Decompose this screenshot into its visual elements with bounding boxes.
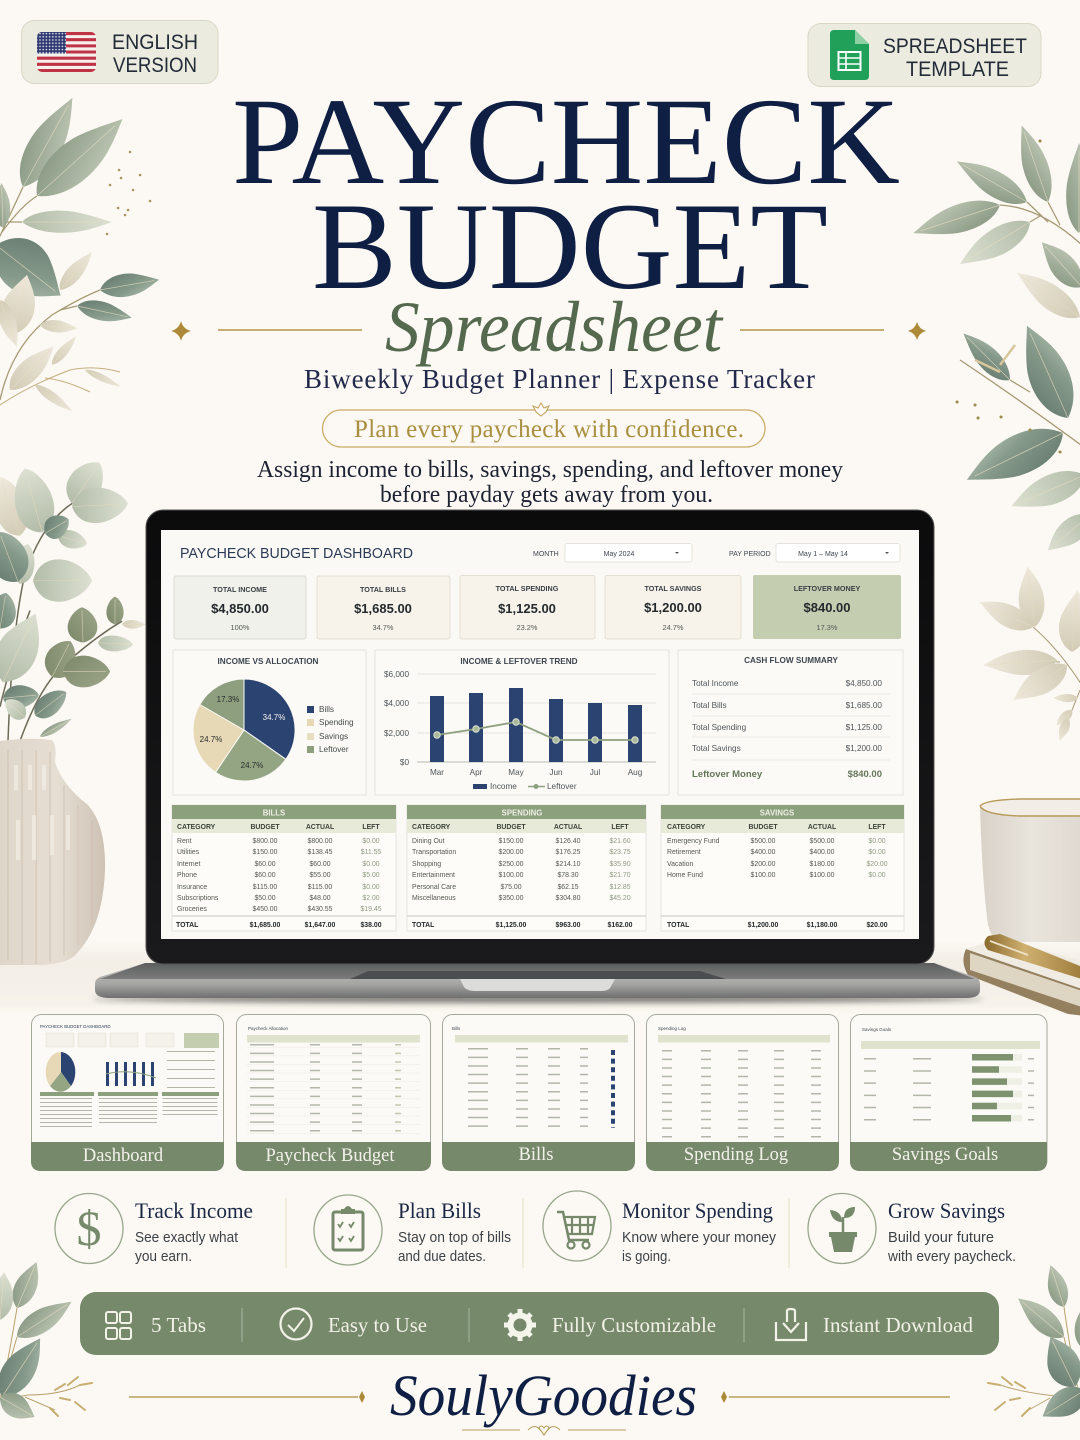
KPI card: leftover money: $840.00 (804, 600, 850, 615)
icon: clipboard (314, 1195, 382, 1265)
table: spending: Miscellaneous (412, 895, 456, 902)
subtitle: Spreadsheet with ornaments (171, 287, 926, 367)
feature: monitor spending: Know where your money (622, 1230, 777, 1246)
coffee cup (980, 799, 1080, 942)
KPI card: total savings: $1,200.00 (644, 600, 702, 615)
table: spending: $75.00 (500, 884, 522, 891)
feature: plan bills (314, 1195, 511, 1265)
KPI card: total bills: 34.7% (373, 623, 394, 632)
panel: income vs allocation pie: 34.7% (263, 713, 285, 722)
table: savings: Home Fund (667, 872, 703, 879)
pie legend: Leftover (319, 745, 349, 754)
month and pay period selectors: MONTH (533, 551, 559, 558)
panel: cash flow summary: Total Spending (692, 723, 747, 732)
pie legend: Bills (319, 705, 334, 714)
KPI card: total income: TOTAL INCOME (213, 585, 267, 594)
table: savings: $100.00 (751, 872, 776, 879)
table: savings: $1,200.00 (748, 922, 778, 929)
panel: income and leftover trend chart: $4,000 (384, 699, 409, 708)
table: savings: LEFT (868, 824, 886, 831)
pie legend (307, 705, 354, 754)
brand: SoulyGoodies (129, 1363, 950, 1435)
table: spending: $35.90 (609, 861, 631, 868)
panel: income and leftover trend chart: $0 (400, 758, 409, 767)
chart legend (473, 782, 577, 791)
vase (0, 739, 105, 965)
table: savings: $180.00 (810, 861, 835, 868)
table: savings: $200.00 (751, 861, 776, 868)
desk surface (0, 940, 1080, 1015)
leftover line (434, 719, 638, 743)
feature bar: Fully Customizable (552, 1313, 716, 1337)
thumbnail: spending log (646, 1014, 839, 1171)
feature bar: 5 Tabs (151, 1313, 206, 1337)
table: bills: Phone (177, 872, 197, 879)
botanical: bottom left corner (0, 1258, 92, 1427)
panel: income vs allocation pie: 17.3% (217, 695, 239, 704)
feature: plan bills: Plan Bills (398, 1198, 481, 1223)
icon: plant in pot (808, 1194, 876, 1264)
thumbnail: dashboard: Dashboard (83, 1146, 164, 1166)
table: savings: ACTUAL (808, 824, 836, 831)
table: bills: LEFT (362, 824, 380, 831)
botanical: left eucalyptus plant (0, 452, 146, 741)
feature: plan bills: Stay on top of bills (398, 1230, 511, 1246)
month and pay period selectors: PAY PERIOD (729, 551, 771, 558)
botanical: top left branch (0, 90, 161, 415)
table: bills: $38.00 (360, 922, 382, 929)
table: spending: Dining Out (412, 838, 445, 845)
feature: track income: Track Income (135, 1198, 253, 1223)
table: spending: $150.00 (499, 838, 524, 845)
panel: income and leftover trend chart: May (508, 768, 525, 777)
KPI card: total spending: 23.2% (517, 623, 538, 632)
panel: income and leftover trend chart: Mar (430, 768, 444, 777)
icon: dollar in circle: $ (76, 1200, 102, 1256)
panel: income and leftover trend chart (375, 650, 669, 795)
table: spending: $45.20 (609, 895, 631, 902)
icon: dollar in circle (55, 1194, 123, 1264)
feature: grow savings (808, 1194, 1016, 1265)
panel: cash flow summary: $4,850.00 (846, 679, 882, 688)
icon: check circle (280, 1308, 312, 1340)
table: savings: TOTAL (667, 922, 689, 929)
panel: cash flow summary: $1,200.00 (846, 744, 882, 753)
table: bills: $60.00 (254, 872, 276, 879)
table: bills: $800.00 (308, 838, 333, 845)
panel: cash flow summary (678, 650, 903, 795)
table: savings: $400.00 (751, 849, 776, 856)
KPI card: total income (174, 576, 306, 639)
thumbnail: dashboard: PAYCHECK BUDGET DASHBOARD (40, 1024, 110, 1029)
table: savings: SAVINGS (760, 808, 794, 818)
table: bills: $11.55 (361, 849, 381, 856)
table: spending: $963.00 (556, 922, 581, 929)
thumbnail: dashboard (31, 1014, 224, 1171)
table: spending: $304.80 (556, 895, 581, 902)
KPI card: total bills (317, 576, 450, 639)
panel: cash flow summary: CASH FLOW SUMMARY (744, 656, 838, 665)
table: spending: $214.10 (556, 861, 581, 868)
panel: income and leftover trend chart: Jul (590, 768, 600, 777)
panel: income vs allocation pie: 24.7% (241, 761, 263, 770)
icon: gear (504, 1309, 536, 1341)
table: savings: $0.00 (868, 872, 886, 879)
table: bills: Subscriptions (177, 895, 219, 902)
panel: cash flow summary: Total Savings (692, 744, 741, 753)
table: savings (661, 805, 904, 931)
icon: shopping cart (543, 1191, 611, 1261)
panel: income and leftover trend chart: Aug (628, 768, 643, 777)
description text: before payday gets away from you. (380, 482, 713, 508)
KPI card: leftover money (753, 575, 901, 639)
table: savings: $100.00 (810, 872, 835, 879)
table: spending: CATEGORY (412, 824, 451, 831)
thumbnail: bills: Bills (452, 1026, 461, 1031)
month and pay period selectors: May 2024 (604, 551, 634, 558)
table: bills: $48.00 (309, 895, 331, 902)
description text (257, 457, 843, 508)
badge: english version (22, 20, 218, 84)
KPI card: leftover money: LEFTOVER MONEY (794, 584, 860, 593)
table: spending: $62.15 (557, 884, 579, 891)
thumbnail: spending log: Spending Log (684, 1145, 788, 1165)
table: bills: $55.00 (309, 872, 331, 879)
feature: monitor spending: is going. (622, 1249, 671, 1265)
panel: cash flow summary: Leftover Money (692, 769, 763, 780)
feature: grow savings: with every paycheck. (887, 1249, 1016, 1265)
title: PAYCHECK BUDGET: BUDGET (312, 178, 828, 315)
thumbnail: bills: Bills (519, 1145, 553, 1165)
pie legend: Savings (319, 732, 348, 741)
KPI card: leftover money: 17.3% (817, 623, 838, 632)
table: bills: $1,647.00 (305, 922, 335, 929)
table: bills: CATEGORY (177, 824, 216, 831)
screen (161, 530, 919, 939)
panel: income and leftover trend chart: $2,000 (384, 729, 409, 738)
table: spending: $21.60 (609, 838, 631, 845)
table: bills: $60.00 (309, 861, 331, 868)
panel: cash flow summary: $1,125.00 (846, 723, 882, 732)
panel: income and leftover trend chart: Jun (549, 768, 563, 777)
icon: google sheets (830, 30, 869, 80)
feature bar (80, 1292, 999, 1355)
table: savings: $400.00 (810, 849, 835, 856)
botanical: top right branch (909, 121, 1080, 560)
badge: english version: VERSION (113, 54, 197, 77)
feature: monitor spending (543, 1191, 777, 1265)
botanical: right mid sprig (975, 565, 1080, 742)
dashboard title: PAYCHECK BUDGET DASHBOARD (180, 546, 413, 562)
chart legend: Leftover (547, 782, 577, 791)
KPI card: total savings (605, 576, 741, 639)
table: savings: Emergency Fund (667, 838, 720, 845)
table: bills: Utilities (177, 849, 200, 856)
table: bills: $5.00 (362, 872, 380, 879)
table: bills: TOTAL (176, 922, 198, 929)
botanical: bottom right corner (988, 1262, 1080, 1428)
table: bills: $2.00 (362, 895, 380, 902)
table: spending: SPENDING (502, 808, 542, 818)
panel: cash flow summary: $1,685.00 (846, 701, 882, 710)
table: bills: $138.45 (308, 849, 333, 856)
thumbnail: paycheck budget (236, 1014, 431, 1171)
tagline: biweekly budget planner: Biweekly Budget Planner | Expense Tracker (304, 364, 815, 394)
table: savings: BUDGET (748, 824, 778, 831)
table: spending: $78.30 (557, 872, 579, 879)
table: savings: $0.00 (868, 849, 886, 856)
panel: income and leftover trend chart: INCOME & LEFTOVER TREND (460, 657, 578, 666)
badge: spreadsheet template: TEMPLATE (906, 58, 1009, 81)
feature: grow savings: Grow Savings (888, 1198, 1005, 1223)
thumbnail: savings goals: Savings Goals (892, 1145, 998, 1165)
bars (430, 688, 642, 762)
panel: cash flow summary: Total Income (692, 679, 739, 688)
table: bills: $1,685.00 (250, 922, 280, 929)
table: bills: $60.00 (254, 861, 276, 868)
table: spending: TOTAL (412, 922, 434, 929)
KPI card: total income: $4,850.00 (211, 601, 269, 616)
table: savings: $20.00 (866, 861, 888, 868)
table: bills: Internet (177, 861, 200, 868)
panel: income and leftover trend chart: Apr (470, 768, 483, 777)
feature: monitor spending: Monitor Spending (622, 1198, 773, 1223)
laptop screen bezel (146, 510, 934, 964)
pill: plan every paycheck (322, 403, 765, 447)
panel: cash flow summary: Total Bills (692, 701, 727, 710)
thumbnail: savings goals (850, 1014, 1047, 1171)
table: spending: $126.40 (556, 838, 581, 845)
table: bills: $150.00 (253, 849, 278, 856)
feature: track income: you earn. (135, 1249, 192, 1265)
pill: plan every paycheck: Plan every paycheck with confidence. (354, 416, 744, 443)
icon: US flag (37, 32, 96, 72)
table: spending: $250.00 (499, 861, 524, 868)
panel: income vs allocation pie: INCOME VS ALLOCATION (218, 657, 319, 666)
table: bills: $430.55 (308, 906, 333, 913)
thumbnail: paycheck budget: Paycheck Budget (266, 1146, 395, 1166)
table: savings: CATEGORY (667, 824, 706, 831)
table: bills: BUDGET (250, 824, 280, 831)
table: spending: $100.00 (499, 872, 524, 879)
icon: download (776, 1309, 806, 1340)
month and pay period selectors (533, 544, 900, 562)
laptop base (95, 963, 980, 998)
table: savings: $500.00 (810, 838, 835, 845)
panel: income vs allocation pie (173, 650, 366, 795)
table: bills: $450.00 (253, 906, 278, 913)
table: spending: Shopping (412, 861, 441, 868)
KPI card: total spending: TOTAL SPENDING (496, 584, 559, 593)
feature: track income: See exactly what (135, 1230, 238, 1246)
panel: income and leftover trend chart: $6,000 (384, 670, 409, 679)
title: PAYCHECK BUDGET: PAYCHECK (232, 73, 900, 210)
table: bills: $19.45 (360, 906, 382, 913)
table: spending: $200.00 (499, 849, 524, 856)
table: bills: $50.00 (254, 895, 276, 902)
table: spending: $21.70 (609, 872, 631, 879)
table: bills: $0.00 (362, 884, 380, 891)
thumbnail: savings goals: Savings Goals (862, 1027, 892, 1032)
thumbnail: spending log: Spending Log (658, 1026, 686, 1031)
feature: grow savings: Build your future (888, 1230, 994, 1246)
notebook and pen (963, 934, 1080, 1016)
badge: spreadsheet template: SPREADSHEET (883, 35, 1027, 58)
icon: tabs grid (106, 1312, 131, 1339)
table: bills: Insurance (177, 884, 207, 891)
table: savings: Retirement (667, 849, 701, 856)
table: spending: ACTUAL (554, 824, 582, 831)
table: bills: $0.00 (362, 838, 380, 845)
KPI card: total savings: TOTAL SAVINGS (645, 584, 702, 593)
badge: spreadsheet template (808, 24, 1041, 86)
thumbnail: paycheck budget: Paycheck Allocation (248, 1026, 289, 1031)
pie chart (193, 679, 295, 781)
table: spending: $23.75 (609, 849, 631, 856)
flourish (462, 1426, 626, 1435)
table: bills: BILLS (263, 808, 285, 818)
panel: cash flow summary: $840.00 (848, 769, 882, 780)
table: spending: LEFT (611, 824, 629, 831)
laptop (93, 510, 983, 1003)
table: spending: $162.00 (608, 922, 633, 929)
badge: english version: ENGLISH (112, 31, 198, 54)
table: bills: $115.00 (308, 884, 332, 891)
KPI card: total bills: TOTAL BILLS (360, 585, 406, 594)
feature: plan bills: and due dates. (398, 1249, 486, 1265)
table: savings: Vacation (667, 861, 693, 868)
table: spending (407, 805, 646, 931)
table: spending: Personal Care (412, 884, 456, 891)
table: savings: $500.00 (751, 838, 776, 845)
KPI card: total income: 100% (231, 623, 250, 632)
subtitle: Spreadsheet with ornaments: Spreadsheet (385, 287, 724, 367)
table: savings: $0.00 (868, 838, 886, 845)
table: savings: $1,180.00 (807, 922, 837, 929)
table: spending: $176.25 (556, 849, 581, 856)
table: spending: Entertainment (412, 872, 455, 879)
table: spending: $12.85 (609, 884, 631, 891)
table: spending: BUDGET (496, 824, 526, 831)
table: bills: Groceries (177, 906, 207, 913)
KPI card: total bills: $1,685.00 (354, 601, 412, 616)
month and pay period selectors: May 1 – May 14 (798, 551, 848, 558)
description text: Assign income to bills, savings, spending, and leftover money (257, 457, 843, 483)
KPI card: total spending: $1,125.00 (498, 601, 556, 616)
table: bills: $115.00 (253, 884, 277, 891)
feature: track income (55, 1194, 253, 1265)
chart legend: Income (490, 782, 517, 791)
pie legend: Spending (319, 718, 354, 727)
table: bills: Rent (177, 838, 192, 845)
thumbnail: bills (442, 1014, 635, 1171)
table: savings: $20.00 (866, 922, 888, 929)
table: bills (172, 805, 396, 931)
table: spending: $350.00 (499, 895, 524, 902)
brand: SoulyGoodies: SoulyGoodies (390, 1363, 697, 1428)
feature bar: Instant Download (823, 1313, 973, 1337)
table: bills: $0.00 (362, 861, 380, 868)
table: bills: ACTUAL (306, 824, 334, 831)
table: spending: Transportation (412, 849, 456, 856)
panel: income vs allocation pie: 24.7% (200, 735, 222, 744)
table: bills: $800.00 (253, 838, 278, 845)
table: spending: $1,125.00 (496, 922, 526, 929)
KPI card: total savings: 24.7% (663, 623, 684, 632)
title: PAYCHECK BUDGET (232, 73, 900, 315)
feature bar: Easy to Use (328, 1313, 427, 1337)
KPI card: total spending (460, 576, 595, 639)
